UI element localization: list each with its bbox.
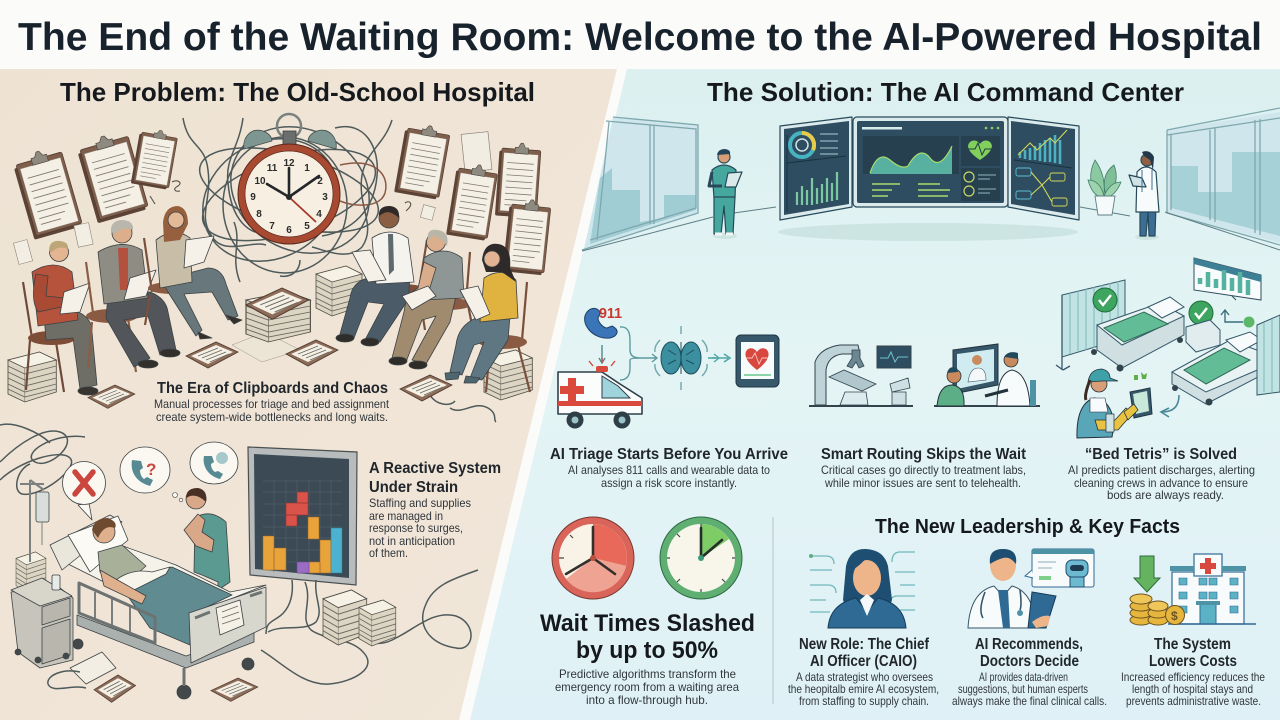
icon: bed one <box>1091 297 1184 372</box>
icon: ambulance <box>558 358 642 428</box>
icon: curtain left <box>1056 280 1125 370</box>
text: wait times: emergency room from a waiting area <box>555 680 739 694</box>
icon: cleaning staff <box>1077 369 1152 438</box>
illustration: wall clock: 4 <box>316 209 322 220</box>
text: era of clipboards and chaos: Manual processes for triage and bed assignment <box>154 397 390 411</box>
text: era of clipboards and chaos: create system-wide bottlenecks and long waits. <box>156 410 388 424</box>
icon: chief ai officer <box>809 549 915 628</box>
icon: hospital with coins <box>1130 554 1256 625</box>
text: reactive system <box>369 460 501 560</box>
illustration: wall clock: 6 <box>286 225 292 236</box>
text: chief ai officer: AI Officer (CAIO) <box>810 653 917 670</box>
person: man in red sweater <box>23 241 98 395</box>
illustration: smart routing icons <box>809 344 1040 406</box>
icon: scanner <box>809 345 913 406</box>
illustration: command center screens <box>780 117 1079 220</box>
text: reactive system: of them. <box>369 546 408 560</box>
illustration: nightstand <box>11 575 73 668</box>
text: ai triage <box>550 446 788 490</box>
text: ai recommends: AI provides data-driven <box>979 670 1068 684</box>
icon: bedside cabinet <box>1186 320 1220 352</box>
person: tired man with glasses <box>389 230 475 369</box>
text: system lowers costs: Lowers Costs <box>1149 653 1237 670</box>
text: bed tetris: bods are always ready. <box>1107 488 1224 502</box>
illustration: hospital bed with patient <box>50 515 266 699</box>
text: chief ai officer: A data strategist who oversees <box>796 670 933 684</box>
left screen <box>780 117 852 220</box>
text: smart routing: Smart Routing Skips the Wait <box>821 446 1027 463</box>
icon: discharge dashboard <box>1194 258 1261 300</box>
illustration: ai triage icons <box>558 305 779 428</box>
illustration: ai triage icons: 911 <box>599 305 622 322</box>
text: chief ai officer: New Role: The Chief <box>799 636 930 653</box>
text: ai triage: AI Triage Starts Before You Arrive <box>550 446 788 463</box>
illustration: tetris monitor <box>248 447 357 585</box>
icon: bed two <box>1172 332 1262 406</box>
illustration: nurse distressed <box>184 488 230 590</box>
illustration: wall clock: 12 <box>283 158 295 169</box>
text: chief ai officer: the heopitalb emire AI ecosystem, <box>788 682 939 696</box>
illustration: right windows <box>1167 108 1280 245</box>
title: The End of the Waiting Room: Welcome to the AI-Powered Hospital <box>18 16 1262 59</box>
illustration: wall clock: 3 <box>322 192 328 203</box>
illustration: left windows <box>582 117 698 250</box>
illustration: tangled wires <box>0 102 496 494</box>
illustration: thought bubbles: ? <box>146 460 156 479</box>
shadow beneath screens <box>778 223 1078 241</box>
panel: the solution <box>540 77 1280 708</box>
text: chief ai officer <box>788 636 939 708</box>
text: reactive system: not in anticipation <box>369 534 455 548</box>
text: reactive system: are managed in <box>369 509 443 523</box>
illustration: paper piles <box>8 266 532 408</box>
person: woman in yellow sweater <box>445 244 530 392</box>
text: ai recommends: always make the final clinical calls. <box>952 694 1107 708</box>
text: reactive system: response to surges, <box>369 521 463 535</box>
panel: the problem <box>0 77 551 702</box>
text: bed tetris: “Bed Tetris” is Solved <box>1085 446 1237 463</box>
panel: problem background <box>0 69 617 720</box>
person: man in grey jacket <box>86 220 180 372</box>
text: ai recommends: AI Recommends, <box>975 636 1083 653</box>
text: bed tetris: cleaning crews in advance to ensure <box>1074 476 1248 490</box>
text: era of clipboards and chaos: The Era of Clipboards and Chaos <box>157 380 388 397</box>
text: reactive system: Staffing and supplies <box>369 496 471 510</box>
text: era of clipboards and chaos <box>154 380 390 424</box>
text: ai recommends: Doctors Decide <box>980 653 1079 670</box>
floor line <box>582 207 1280 251</box>
text: bed tetris <box>1068 446 1255 502</box>
illustration: wall clock: 1 <box>304 163 310 174</box>
text: ai recommends <box>952 636 1107 708</box>
text: wait times: by up to 50% <box>576 637 718 664</box>
center screen <box>853 117 1008 207</box>
text: chief ai officer: from staffing to supply chain. <box>799 694 929 708</box>
illustration: floor papers <box>48 652 258 702</box>
heading: new leadership: The New Leadership & Key Facts <box>875 516 1180 538</box>
illustration: doctor with tablet <box>1129 151 1159 240</box>
text: ai triage: assign a risk score instantly. <box>601 476 737 490</box>
text: ai triage: AI analyses 811 calls and wearable data to <box>568 463 770 477</box>
illustration: thought bubbles <box>62 442 238 520</box>
icon: telehealth consultation <box>934 344 1040 406</box>
illustration: wall clock: 2 <box>317 176 323 187</box>
text: wait times <box>540 610 755 707</box>
illustration: iv stand <box>20 480 49 562</box>
illustration: wall clock: 11 <box>267 163 278 174</box>
text: ai recommends: suggestions, but human esperts <box>958 682 1088 696</box>
person: woman with papers <box>144 206 242 339</box>
illustration: wall clock: 10 <box>254 176 266 187</box>
text: bed tetris: AI predicts patient discharges, alerting <box>1068 463 1255 477</box>
text: wait times: Predictive algorithms transform the <box>559 667 736 681</box>
icon: short wait clock <box>660 517 742 599</box>
icon: curtain right <box>1257 315 1280 395</box>
text: system lowers costs: length of hospital stays and <box>1132 682 1253 696</box>
illustration: wall clock: 5 <box>304 221 310 232</box>
text: system lowers costs <box>1121 636 1265 708</box>
text: wait times: into a flow-through hub. <box>586 693 708 707</box>
icon: doctor and ai <box>968 549 1094 628</box>
illustration: potted plant <box>1088 160 1121 215</box>
text: wait times: Wait Times Slashed <box>540 610 755 637</box>
text: smart routing: while minor issues are sent to telehealth. <box>824 476 1021 490</box>
illustration: wall clock: 7 <box>269 221 275 232</box>
icon: heart monitor tablet <box>736 335 779 387</box>
text: reactive system: A Reactive System <box>369 460 501 477</box>
icon: brain <box>655 326 730 390</box>
illustration: wall clock: 9 <box>250 192 256 203</box>
panel: solution background <box>470 69 1280 720</box>
illustration: wall clock <box>238 114 340 244</box>
icon: hospital with coins: $ <box>1171 609 1178 623</box>
text: smart routing: Critical cases go directly to treatment labs, <box>821 463 1026 477</box>
illustration: wall clock: 8 <box>256 209 262 220</box>
text: smart routing <box>821 446 1027 490</box>
heading: the problem: The Problem: The Old-School Hospital <box>60 77 535 107</box>
illustration: clipboards on the wall <box>11 122 551 275</box>
text: reactive system: Under Strain <box>369 479 458 496</box>
illustration: bed management icons <box>1056 258 1280 438</box>
illustration: floor wires <box>261 570 478 684</box>
heading: the solution: The Solution: The AI Command Center <box>707 77 1184 107</box>
right screen <box>1008 117 1079 220</box>
text: system lowers costs: The System <box>1154 636 1231 653</box>
illustration: nurse with clipboard <box>709 149 742 239</box>
illustration: paper piles on floor <box>16 552 396 646</box>
person: man in white shirt <box>336 206 427 346</box>
icon: long wait clock <box>552 517 634 599</box>
